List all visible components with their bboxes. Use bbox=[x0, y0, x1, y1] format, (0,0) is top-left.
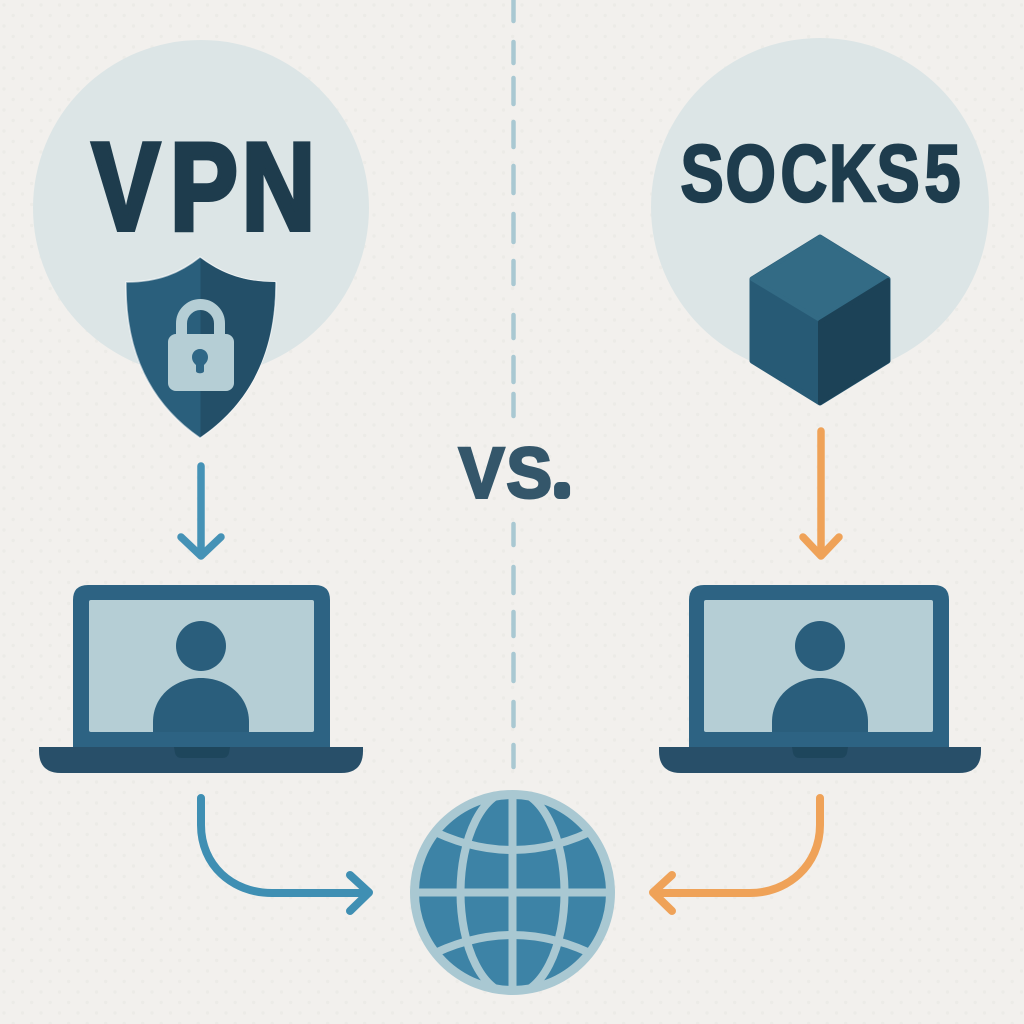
heading: VPN: VPN bbox=[92, 118, 315, 257]
arrow: SOCKS5 to laptop bbox=[803, 431, 839, 556]
icon: globe bbox=[410, 790, 615, 995]
icon: laptop with user bbox=[39, 585, 363, 773]
arrow: laptop to internet bbox=[201, 798, 369, 911]
VPN background circle bbox=[33, 40, 369, 376]
label: vs.: VS bbox=[459, 433, 552, 513]
icon: cube bbox=[752, 237, 888, 403]
arrow: VPN to laptop bbox=[181, 466, 221, 556]
icon: laptop with user bbox=[659, 585, 981, 773]
dashed divider bbox=[511, 0, 516, 767]
SOCKS5 background circle bbox=[651, 38, 989, 376]
heading: SOCKS5: SOCKS5 bbox=[680, 128, 961, 219]
label: vs.: . bbox=[557, 459, 567, 503]
arrow: laptop to internet bbox=[653, 798, 820, 911]
panel: VPN bbox=[33, 40, 369, 911]
panel: SOCKS5 bbox=[651, 38, 989, 911]
icon: shield with padlock bbox=[126, 257, 276, 438]
